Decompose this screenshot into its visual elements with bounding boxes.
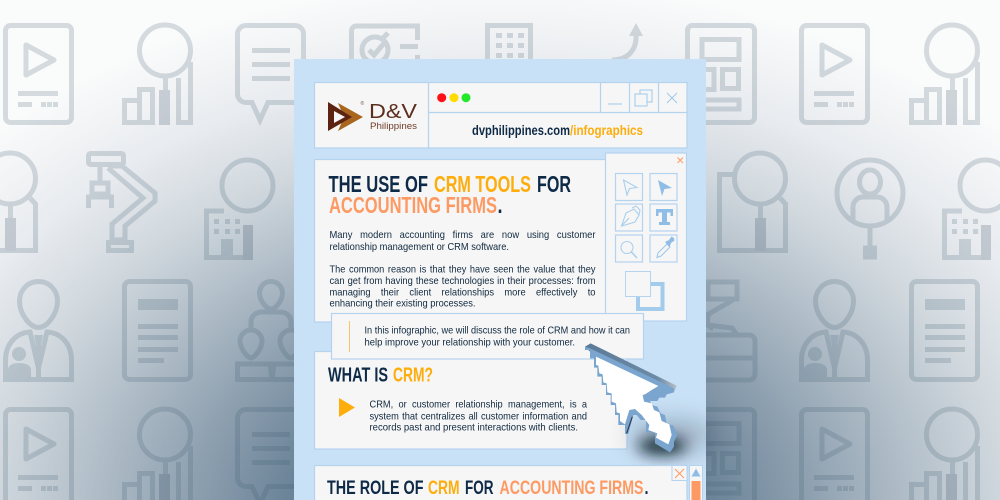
close box <box>672 466 687 480</box>
panel: tool palette <box>606 153 686 321</box>
icon: video document bottom right <box>802 410 868 500</box>
window traffic lights <box>437 93 470 102</box>
cursor outline <box>585 347 677 452</box>
icon: video document <box>6 26 72 122</box>
title <box>328 171 571 218</box>
icon: text tool <box>656 209 673 225</box>
icon: text document right <box>912 282 978 380</box>
intro paragraphs: The common reason is that they have seen the value that they <box>330 265 596 276</box>
intro paragraphs: Many modern accounting firms are now using customer <box>330 230 596 241</box>
heading: ACCOUNTING FIRMS <box>500 477 644 499</box>
logo: D&V Philippines: ® <box>360 100 364 107</box>
cursor top edge <box>585 343 677 392</box>
icon: person at desk <box>690 282 755 380</box>
panel: intro card <box>314 160 614 322</box>
icon: group of people <box>238 282 302 382</box>
icon: chart bottom left <box>124 409 190 500</box>
icon: magnifier over bar chart <box>124 25 190 125</box>
title: ACCOUNTING FIRMS <box>329 192 497 218</box>
icon: minimize <box>608 103 622 105</box>
url text: dvphilippines.com <box>472 123 570 138</box>
icon: checklist <box>352 26 418 63</box>
cursor fill <box>596 357 672 444</box>
definition text: CRM, or customer relationship management, is a <box>370 400 587 411</box>
panel: role of crm <box>314 466 687 500</box>
icon: restore <box>635 90 652 106</box>
url path: /infographics <box>570 123 643 138</box>
icon: close <box>667 93 677 103</box>
heading: CRM <box>428 477 460 499</box>
heading: THE ROLE OF <box>327 477 424 499</box>
logo: D&V Philippines: D&V <box>369 101 418 123</box>
icon: page layout <box>688 26 754 122</box>
icon: magnifier over building <box>206 160 273 260</box>
icon: office building <box>488 26 530 66</box>
icon: layout bottom <box>688 410 754 500</box>
callout: In this infographic, we will discuss the role of CRM and how it can <box>364 326 630 336</box>
icon: palette close <box>678 158 683 163</box>
icon: chart bottom right <box>912 409 978 500</box>
intro paragraphs: can get from having these technologies in their processes: from <box>330 276 596 287</box>
icon: speech bubble <box>238 26 304 120</box>
title: FOR <box>537 171 571 197</box>
icon: filled arrow <box>658 180 672 196</box>
intro paragraphs <box>330 230 596 310</box>
definition text: system that centralizes all customer information and <box>370 412 587 422</box>
title: . <box>498 192 502 218</box>
icon: robot arm <box>88 154 155 250</box>
heading <box>327 477 648 499</box>
icon: magnifier over document right <box>720 153 786 251</box>
heading: WHAT IS <box>328 365 388 387</box>
icon: suited person <box>6 282 72 382</box>
intro paragraphs: enhancing their existing processes. <box>330 299 476 310</box>
cursor shadow <box>630 422 714 455</box>
definition text: records past and present interactions with clients. <box>370 423 578 434</box>
color swatches <box>626 272 662 309</box>
icon: magnifier over document left <box>0 153 36 251</box>
icon: magnifier over building right <box>944 160 1000 260</box>
icon: text document <box>124 282 190 380</box>
tool buttons <box>616 174 677 262</box>
title: CRM TOOLS <box>434 171 531 197</box>
icon: magnifier over chart right <box>912 25 978 125</box>
callout: help improve your relationship with your customer. <box>364 338 575 348</box>
heading: . <box>644 477 648 499</box>
icon: magnifier <box>621 242 637 258</box>
panel: browser header <box>314 82 687 148</box>
icon: speech bubble bottom <box>238 410 304 500</box>
callout <box>332 314 644 359</box>
definition text <box>370 400 587 434</box>
icon: suited person right <box>802 282 868 382</box>
icon: orange play <box>339 398 355 417</box>
icon: video document right <box>802 26 868 122</box>
heading: FOR <box>465 477 494 499</box>
heading: CRM? <box>393 365 433 387</box>
icon: curved arrow <box>612 23 643 60</box>
icon: magnifier over person <box>837 160 903 257</box>
intro paragraphs: managing their client relationships more effectively to <box>330 288 596 299</box>
icon: pixel cursor <box>585 343 677 452</box>
logo: D&V Philippines: Philippines <box>370 121 417 132</box>
panel: infographic page <box>294 59 706 500</box>
icon: pen nib <box>622 206 640 226</box>
intro paragraphs: relationship management or CRM software. <box>330 242 509 253</box>
scrollbar <box>690 466 702 500</box>
icon: outline arrow <box>624 180 637 195</box>
icon: video document bottom left <box>6 410 72 500</box>
icon: eyedropper <box>657 236 674 258</box>
panel: what is crm <box>314 352 627 449</box>
title: THE USE OF <box>328 171 428 197</box>
logo: D&V Philippines <box>328 100 418 132</box>
